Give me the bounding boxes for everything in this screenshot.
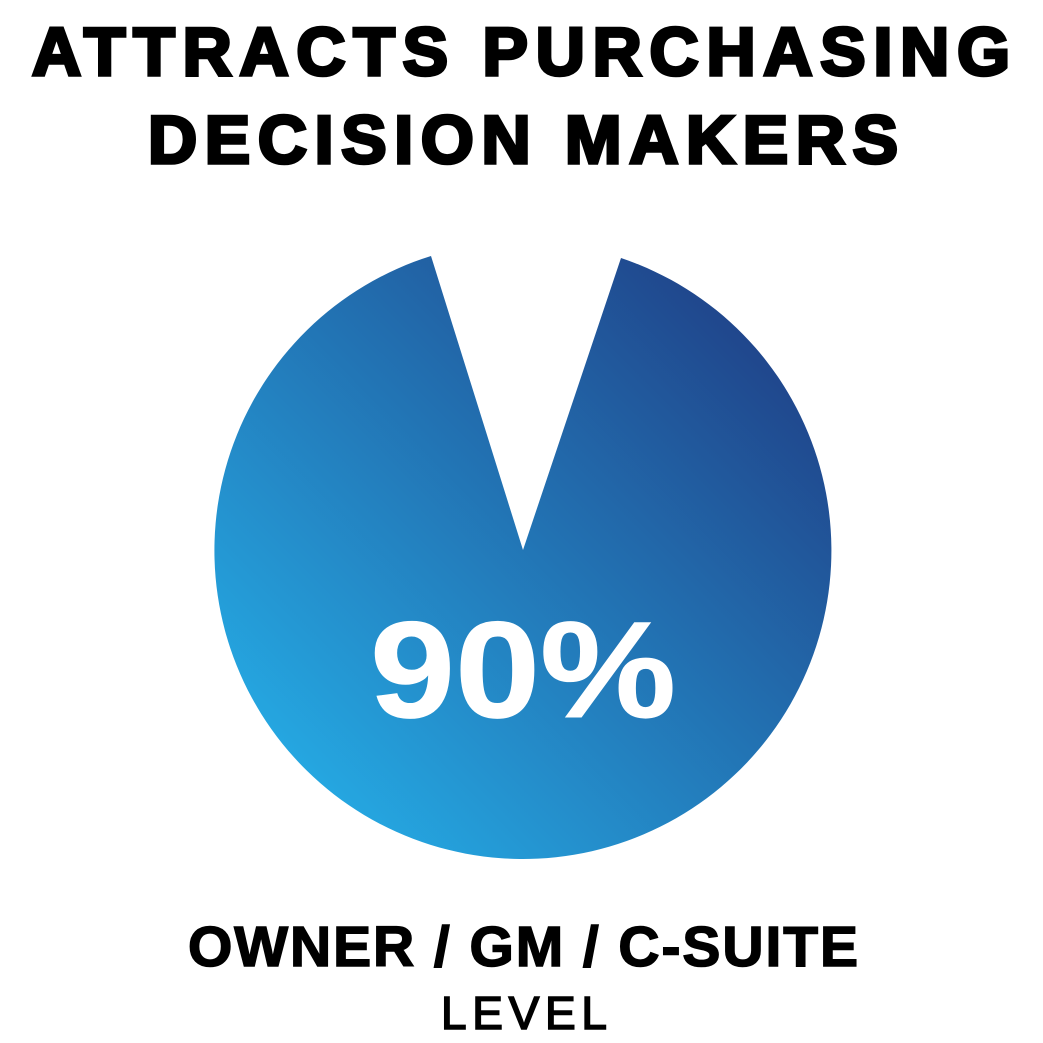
caption (188, 915, 858, 1039)
title (32, 14, 1010, 178)
caption: OWNER / GM / C-SUITE (188, 915, 858, 979)
value label: 90% (370, 594, 676, 747)
title: DECISION MAKERS (148, 102, 898, 178)
pie slice (214, 256, 831, 859)
caption: LEVEL (441, 987, 607, 1039)
title: ATTRACTS PURCHASING (32, 14, 1010, 90)
